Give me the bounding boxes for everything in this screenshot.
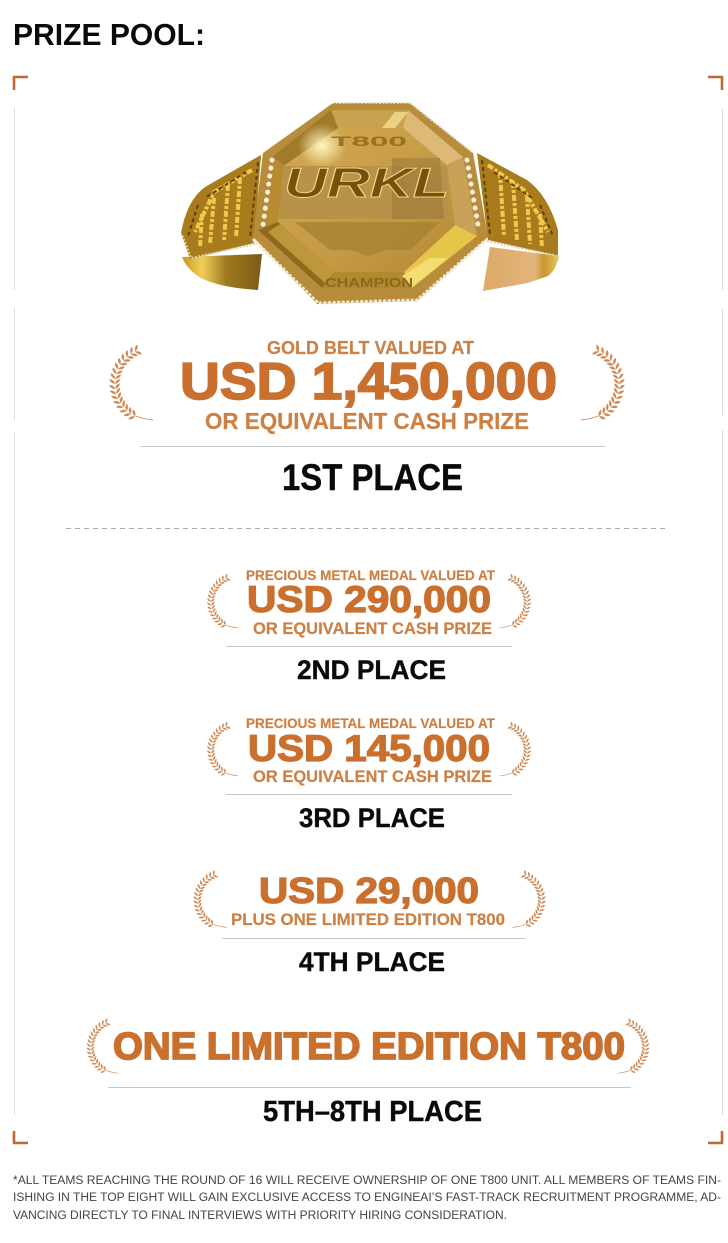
prize amount: USD 1,450,000 [180, 353, 557, 411]
prize amount: USD 145,000 [248, 728, 490, 769]
icon: laurel left [109, 345, 153, 421]
belt strap left [182, 254, 262, 290]
placing: 3RD PLACE [299, 803, 445, 833]
prize amount: USD 290,000 [247, 579, 491, 620]
icon: laurel right [500, 574, 531, 629]
prize description: GOLD BELT VALUED AT [267, 338, 474, 358]
belt side plate right [477, 153, 558, 256]
prize description: PRECIOUS METAL MEDAL VALUED AT [246, 716, 496, 731]
belt logo: URKL [284, 159, 449, 206]
prize description: PRECIOUS METAL MEDAL VALUED AT [246, 568, 496, 583]
belt side plate left [181, 155, 261, 259]
icon: laurel left [86, 1018, 118, 1074]
icon: laurel right [618, 1018, 650, 1074]
icon: laurel left [193, 870, 227, 928]
belt bottom label: CHAMPION [325, 275, 413, 290]
icon: gold championship belt [181, 103, 559, 304]
icon: laurel right [581, 345, 625, 421]
belt top label: T800 [331, 133, 407, 149]
title: PRIZE POOL: [13, 17, 205, 52]
placing: 1ST PLACE [282, 457, 463, 498]
prize alternative: OR EQUIVALENT CASH PRIZE [253, 768, 492, 786]
belt strap right [483, 247, 559, 291]
panel: 4th place [193, 870, 546, 977]
footnote: *ALL TEAMS REACHING THE ROUND OF 16 WILL RECEIVE OWNERSHIP OF ONE T800 UNIT. ALL MEMBERS OF TEAMS FIN- [13, 1173, 721, 1187]
panel: 3rd place [207, 716, 531, 833]
prize alternative: OR EQUIVALENT CASH PRIZE [253, 620, 492, 638]
prize alternative: OR EQUIVALENT CASH PRIZE [205, 408, 529, 434]
icon: laurel right [500, 722, 531, 777]
panel: 5th to 8th place [86, 1018, 650, 1128]
footnote [13, 1173, 721, 1222]
placing: 2ND PLACE [297, 655, 446, 685]
plate facets [331, 110, 408, 128]
placing: 4TH PLACE [299, 947, 445, 977]
panel: 2nd place [207, 568, 531, 685]
belt lion emblem [295, 222, 440, 256]
footnote: VANCING DIRECTLY TO FINAL INTERVIEWS WITH PRIORITY HIRING CONSIDERATION. [13, 1208, 507, 1222]
belt center panel [279, 166, 449, 219]
belt octagon plate [253, 103, 488, 304]
placing: 5TH–8TH PLACE [263, 1096, 482, 1128]
icon: laurel left [207, 574, 238, 629]
icon: laurel left [207, 722, 238, 777]
panel: 1st place [109, 338, 625, 498]
icon: laurel right [512, 870, 546, 928]
prize amount: USD 29,000 [259, 870, 479, 911]
prize: ONE LIMITED EDITION T800 [113, 1026, 625, 1068]
belt gem rows [254, 103, 486, 303]
prize alternative: PLUS ONE LIMITED EDITION T800 [231, 910, 505, 929]
footnote: ISHING IN THE TOP EIGHT WILL GAIN EXCLUSIVE ACCESS TO ENGINEAI’S FAST-TRACK RECRUITMENT PROGRAMME, AD- [13, 1190, 721, 1204]
